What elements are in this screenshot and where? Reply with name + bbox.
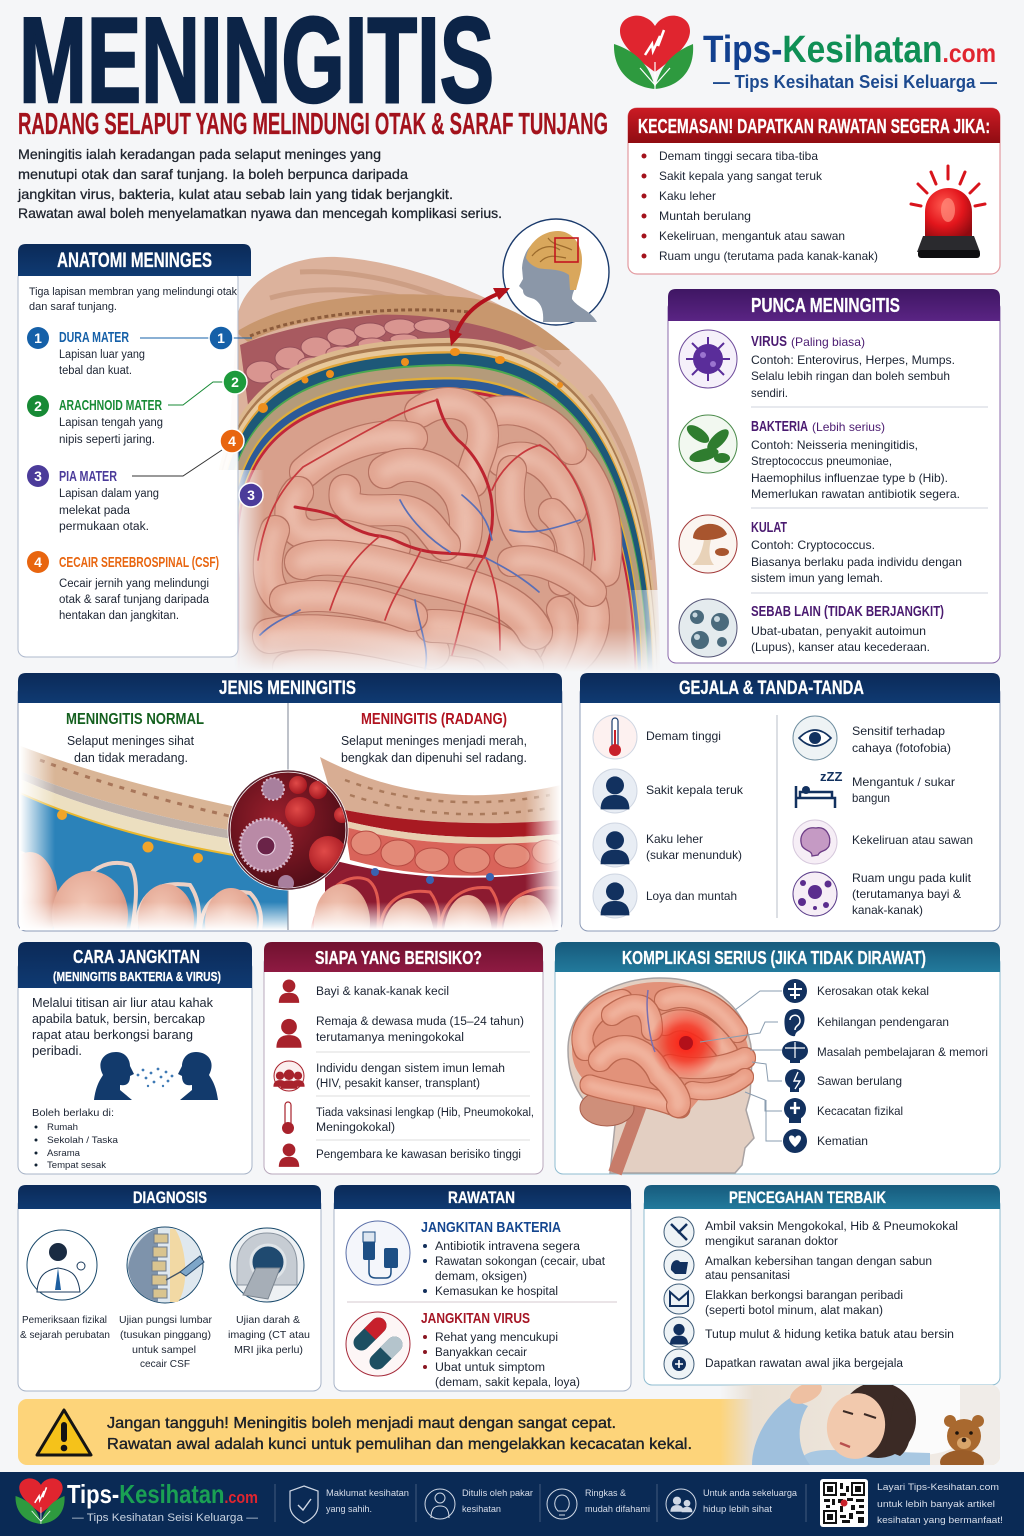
normal heading and text: Selaput meninges sihat [67,734,195,748]
panel: jenis meningitis [18,673,562,932]
risk: pengembara [279,1144,521,1167]
footer call to action [877,1482,1003,1526]
cara heading: (MENINGITIS BAKTERIA & VIRUS) [53,969,221,984]
punca: bakteria: Haemophilus influenzae type b (Hib). [751,471,948,485]
brain gyri [268,403,607,674]
punca: bakteria: (Lebih serius) [812,420,885,434]
icon: warning triangle [37,1410,91,1455]
layer: cecair serebrospinal: 4 [34,554,42,570]
anatomi heading: ANATOMI MENINGES [57,249,212,272]
punca: kulat: KULAT [751,519,787,536]
panel: punca meningitis [668,289,1000,663]
anatomi intro: Tiga lapisan membran yang melindungi otak [29,286,237,298]
prevention: elak berkongsi: (seperti botol minum, alat makan) [705,1305,883,1317]
punca: sebab lain [679,593,988,657]
leader lines [700,991,782,1141]
emergency list: Kaku leher [659,189,716,203]
icon: siren [911,166,985,258]
diagnosis captions: untuk sampel [132,1344,196,1356]
illustration: inflamed meninges [311,757,560,929]
subtitle: RADANG SELAPUT YANG MELINDUNGI OTAK & SARAF TUNJANG [18,106,608,141]
cara heading: CARA JANGKITAN [73,947,200,967]
footer: pakar [425,1488,533,1519]
punca: bakteria [679,407,988,501]
normal heading and text: MENINGITIS NORMAL [66,711,204,728]
layer: cecair serebrospinal: CECAIR SEREBROSPINAL (CSF) [59,554,219,571]
radang heading and text [341,711,527,765]
complication: kematian [783,1129,868,1153]
symptom: ruam: kanak-kanak) [852,903,923,917]
jenis heading: JENIS MENINGITIS [219,678,356,699]
cara text: rapat atau berkongsi barang [32,1028,193,1042]
warning text: Jangan tangguh! Meningitis boleh menjadi maut dengan sangat cepat. [107,1415,616,1432]
cara locations: Rumah [47,1122,78,1133]
risk: bayi: Bayi & kanak-kanak kecil [316,986,449,998]
complication: kerosakan otak [783,979,929,1003]
symptom: kekeliruan: Kekeliruan atau sawan [852,833,973,847]
complication: kerosakan otak: Kerosakan otak kekal [817,984,929,998]
illustration: brain in head profile [568,978,754,1173]
footer: ringkas [547,1488,650,1519]
outer scalp dome [238,256,660,646]
layer: arachnoid mater: 2 [34,398,42,414]
punca: bakteria: Contoh: Neisseria meningitidis, [751,438,918,452]
orange droplets on the band [258,348,563,413]
diagnosis heading: DIAGNOSIS [133,1188,207,1207]
dura flap ledge [236,294,570,350]
risk: imun lemah: (HIV, pesakit kanser, transplant) [316,1078,480,1090]
cara locations [32,1107,119,1171]
diagnosis captions: imaging (CT atau [228,1329,310,1341]
punca: virus [679,330,955,400]
layer: cecair serebrospinal [27,551,219,622]
rawatan: virus: JANGKITAN VIRUS [421,1310,530,1327]
magnified inflammatory cells [229,771,350,891]
risk: vaksinasi: Tiada vaksinasi lengkap (Hib, Pneumokokal, [316,1107,534,1119]
cara locations: Asrama [47,1148,81,1159]
risk: pengembara: Pengembara ke kawasan berisiko tinggi [316,1149,521,1161]
risk: vaksinasi [282,1102,534,1134]
logo: Tips-Kesihatan: — Tips Kesihatan Seisi Keluarga — [713,72,997,92]
symptom: demam: Demam tinggi [646,729,721,743]
pencegahan heading: PENCEGAHAN TERBAIK [729,1188,887,1207]
layer: pia mater: melekat pada [59,505,131,517]
symptom: fotofobia [793,716,951,760]
rawatan: virus: Banyakkan cecair [435,1347,527,1359]
complication: sawan: Sawan berulang [817,1074,902,1088]
symptom: sakit kepala: Sakit kepala teruk [646,783,744,797]
diagnosis captions: cecair CSF [140,1358,190,1370]
punca: virus: Selalu lebih ringan dan boleh sembuh [751,369,950,383]
footer: sekeluarga: hidup lebih sihat [703,1504,772,1515]
footer logo [15,1478,258,1524]
punca: sebab lain: Ubat-ubatan, penyakit autoimun [751,624,926,638]
punca: kulat: sistem imun yang lemah. [751,571,883,585]
callouts: numbered markers with leader lines [132,326,263,507]
exposed folds under the flap [240,314,537,404]
complication: pendengaran: Kehilangan pendengaran [817,1015,949,1029]
prevention: vaksin: mengikut saranan doktor [705,1236,838,1248]
layer: arachnoid mater: ARACHNOID MATER [59,397,162,414]
prevention: vaksin: Ambil vaksin Mengokokal, Hib & Pneumokokal [705,1221,958,1233]
diagnosis captions [20,1314,310,1370]
symptom: mengantuk [796,769,955,808]
rawatan: bakteria: demam, oksigen) [435,1271,527,1283]
prevention: elak berkongsi [664,1284,903,1317]
footer: maklumat sahih: Maklumat kesihatan [326,1488,409,1499]
footer: ringkas: mudah difahami [585,1504,650,1515]
layer: dura mater: Lapisan luar yang [59,349,145,361]
cara text: peribadi. [32,1044,82,1058]
punca: kulat: Biasanya berlaku pada individu dengan [751,555,962,569]
punca: kulat [679,508,988,585]
complication: pembelajaran: Masalah pembelajaran & memori [817,1045,988,1059]
emergency list: Kekeliruan, mengantuk atau sawan [659,229,845,243]
panel: siapa berisiko [264,942,543,1174]
warning text [107,1415,692,1453]
normal heading and text: dan tidak meradang. [74,751,188,765]
emergency list: Muntah berulang [659,209,751,223]
rawatan: bakteria: Antibiotik intravena segera [435,1241,581,1253]
layer: pia mater [27,465,159,533]
layer: arachnoid mater: Lapisan tengah yang [59,417,163,429]
punca: kulat: Contoh: Cryptococcus. [751,538,875,552]
panel: pencegahan [644,1185,1000,1385]
gejala heading: GEJALA & TANDA-TANDA [679,678,864,699]
prevention: kebersihan tangan: atau pensanitasi [705,1270,790,1282]
rawatan: bakteria [346,1219,606,1298]
panel: cara jangkitan [18,942,252,1174]
siapa heading: SIAPA YANG BERISIKO? [315,948,482,968]
diagnosis captions: Ujian pungsi lumbar [119,1314,212,1326]
panel: rawatan [334,1185,631,1391]
footer call to action: kesihatan yang bermanfaat! [877,1515,1003,1526]
layer: dura mater: 1 [34,330,42,346]
callouts: numbered markers with leader lines: 3 [247,487,255,503]
diagnosis captions: (tusukan pinggang) [120,1329,211,1341]
panel: emergency signs [628,108,1000,274]
diagnosis captions: Ujian darah & [236,1314,300,1326]
symptom: mengantuk: zZZ [820,769,842,784]
footer: maklumat sahih: yang sahih. [326,1504,372,1515]
punca: sebab lain: SEBAB LAIN (TIDAK BERJANGKIT) [751,603,944,620]
callouts: numbered markers with leader lines: 2 [231,374,239,390]
symptom: fotofobia: Sensitif terhadap [852,724,945,738]
icon: head locator [503,219,609,325]
panel: gejala [580,673,1000,931]
cara text: apabila batuk, bersin, bercakap [32,1012,205,1026]
punca: virus: (Paling biasa) [791,335,865,349]
layer: dura mater: tebal dan kuat. [59,365,132,377]
prevention: kebersihan tangan: Amalkan kebersihan tangan dengan sabun [705,1256,932,1268]
prevention: kebersihan tangan [664,1250,932,1282]
panel: anatomi meninges [18,244,251,657]
prevention: vaksin [664,1217,958,1248]
footer call to action: untuk lebih banyak artikel [877,1499,995,1510]
complication: sawan [785,1069,902,1092]
layer: pia mater: permukaan otak. [59,521,149,533]
footer: pakar: Ditulis oleh pakar [462,1488,533,1499]
complication: kecacatan: Kecacatan fizikal [817,1104,903,1118]
symptom: kaku leher: (sukar menunduk) [646,848,742,862]
complication: kecacatan [784,1098,903,1123]
cara locations: Sekolah / Taska [47,1135,119,1146]
symptom: kekeliruan [793,820,973,864]
rawatan: virus: Rehat yang mencukupi [435,1332,558,1344]
risk: bayi [279,980,449,1003]
radang heading and text: MENINGITIS (RADANG) [361,711,507,728]
symptom: mengantuk: Mengantuk / sukar [852,775,955,789]
icon: MRI scanner [230,1228,304,1302]
child photo illustration [723,1385,1000,1465]
layer: cecair serebrospinal: otak & saraf tunjang daripada [59,594,210,606]
layer: arachnoid mater [27,395,163,446]
risk: remaja: Remaja & dewasa muda (15–24 tahun) [316,1016,524,1028]
punca: bakteria: BAKTERIA [751,418,808,435]
komplikasi heading: KOMPLIKASI SERIUS (JIKA TIDAK DIRAWAT) [622,948,926,968]
prevention: rawatan awal: Dapatkan rawatan awal jika bergejala [705,1358,904,1370]
diagnosis captions: Pemeriksaan fizikal [22,1314,107,1326]
intro text: Meningitis ialah keradangan pada selaput meninges yang [18,146,381,162]
illustration: normal meninges [22,747,288,929]
prevention: rawatan awal [664,1349,904,1379]
footer: pakar: kesihatan [462,1504,501,1515]
layer: pia mater: Lapisan dalam yang [59,488,159,500]
anatomi intro: dan saraf tunjang. [29,301,117,313]
cara text [32,996,214,1058]
layer: dura mater: DURA MATER [59,329,129,346]
footer [0,1472,1024,1536]
layer: pia mater: PIA MATER [59,468,117,485]
cara locations: Tempat sesak [47,1160,106,1171]
punca heading: PUNCA MENINGITIS [751,295,900,317]
footer logo: — Tips Kesihatan Seisi Keluarga — [72,1512,258,1524]
rawatan: virus [346,1310,580,1389]
risk: vaksinasi: Meningokokal) [316,1122,395,1134]
cara heading [53,947,221,984]
logo: Tips-Kesihatan: Tips-Kesihatan.com [703,29,996,71]
rawatan: bakteria: JANGKITAN BAKTERIA [421,1219,561,1236]
callouts: numbered markers with leader lines: 1 [217,330,225,346]
QR code [820,1479,868,1527]
risk: remaja: terutamanya meningokokal [316,1032,464,1044]
symptom: kaku leher [593,823,742,867]
footer logo: Tips-Kesihatan.com [67,1479,258,1509]
complication: pembelajaran [782,1041,988,1063]
footer: sekeluarga [666,1488,798,1519]
layer: cecair serebrospinal: hentakan dan jangkitan. [59,610,179,622]
punca: virus: Contoh: Enterovirus, Herpes, Mumps. [751,353,955,367]
intro text: menutupi otak dan saraf tunjang. Ia boleh berpunca daripada [18,166,408,182]
cara locations: Boleh berlaku di: [32,1107,114,1119]
complication: pendengaran [784,1009,949,1036]
meninges layers [238,338,654,590]
symptom: kaku leher: Kaku leher [646,832,703,846]
anatomi intro [29,286,237,313]
radang heading and text: bengkak dan dipenuhi sel radang. [341,751,527,765]
normal heading and text [66,711,204,765]
icon: lumbar puncture [127,1227,204,1303]
panel: diagnosis [18,1185,321,1391]
icon: doctor [27,1230,97,1300]
emergency list [642,149,878,263]
symptom: ruam: (terutamanya bayi & [852,887,961,901]
symptom: ruam [793,871,972,917]
logo: Tips-Kesihatan [614,16,997,92]
warning text: Rawatan awal adalah kunci untuk pemulihan dan mengelakkan kecacatan kekal. [107,1436,692,1453]
symptom: ruam: Ruam ungu pada kulit [852,871,972,885]
cara text: Melalui titisan air liur atau kahak [32,996,214,1010]
radang heading and text: Selaput meninges menjadi merah, [341,734,527,748]
diagnosis captions: MRI jika perlu) [234,1344,303,1356]
risk: imun lemah: Individu dengan sistem imun lemah [316,1063,505,1075]
rawatan: bakteria: Rawatan sokongan (cecair, ubat [435,1256,606,1268]
punca: virus: sendiri. [751,386,788,400]
symptom: loya: Loya dan muntah [646,889,737,903]
emergency list: Demam tinggi secara tiba-tiba [659,149,818,163]
risk: remaja [276,1016,524,1048]
callouts: numbered markers with leader lines: 4 [228,433,236,449]
rawatan: virus: (demam, sakit kepala, loya) [435,1377,580,1389]
prevention: elak berkongsi: Elakkan berkongsi barangan peribadi [705,1290,903,1302]
risk: imun lemah [273,1061,505,1091]
warning banner [18,1385,1000,1465]
complication: kematian: Kematian [817,1134,868,1148]
emergency list: Sakit kepala yang sangat teruk [659,169,823,183]
arrow: head to section [449,288,510,346]
prevention: tutup mulut [664,1317,954,1347]
layer: dura mater [27,327,145,377]
prevention: tutup mulut: Tutup mulut & hidung ketika batuk atau bersin [705,1329,954,1341]
punca: bakteria: Memerlukan rawatan antibiotik segera. [751,487,960,501]
illustration: brain and meninges cross-section [200,257,670,680]
intro text: Rawatan awal boleh menyelamatkan nyawa dan mencegah komplikasi serius. [18,205,502,221]
fades of illustration edges [236,630,660,672]
symptom: fotofobia: cahaya (fotofobia) [852,741,951,755]
footer call to action: Layari Tips-Kesihatan.com [877,1482,999,1493]
diagnosis captions: & sejarah perubatan [20,1329,110,1341]
footer: maklumat sahih [290,1486,409,1523]
symptom: demam [593,715,721,759]
symptom: loya [593,874,737,918]
icon: droplets between two people [94,1052,218,1100]
footer: ringkas: Ringkas & [585,1488,627,1499]
punca: sebab lain: (Lupus), kanser atau kecederaan. [751,640,930,654]
layer: arachnoid mater: nipis seperti jaring. [59,434,155,446]
brain blood vessels [258,400,595,670]
footer: sekeluarga: Untuk anda sekeluarga [703,1488,798,1499]
rawatan: virus: Ubat untuk simptom [435,1362,545,1374]
punca: virus: VIRUS [751,333,787,350]
symptom: mengantuk: bangun [852,791,890,805]
symptom: sakit kepala [593,769,744,813]
rawatan heading: RAWATAN [448,1188,515,1207]
intro text [17,146,502,221]
intro text: jangkitan virus, bakteria, kulat atau sebab lain yang tidak berjangkit. [17,186,453,202]
punca: bakteria: Streptococcus pneumoniae, [751,454,892,468]
panel: komplikasi serius [555,942,1000,1174]
layer: cecair serebrospinal: Cecair jernih yang melindungi [59,578,209,590]
emergency list: Ruam ungu (terutama pada kanak-kanak) [659,249,878,263]
layer: pia mater: 3 [34,468,42,484]
rawatan: bakteria: Kemasukan ke hospital [435,1286,558,1298]
